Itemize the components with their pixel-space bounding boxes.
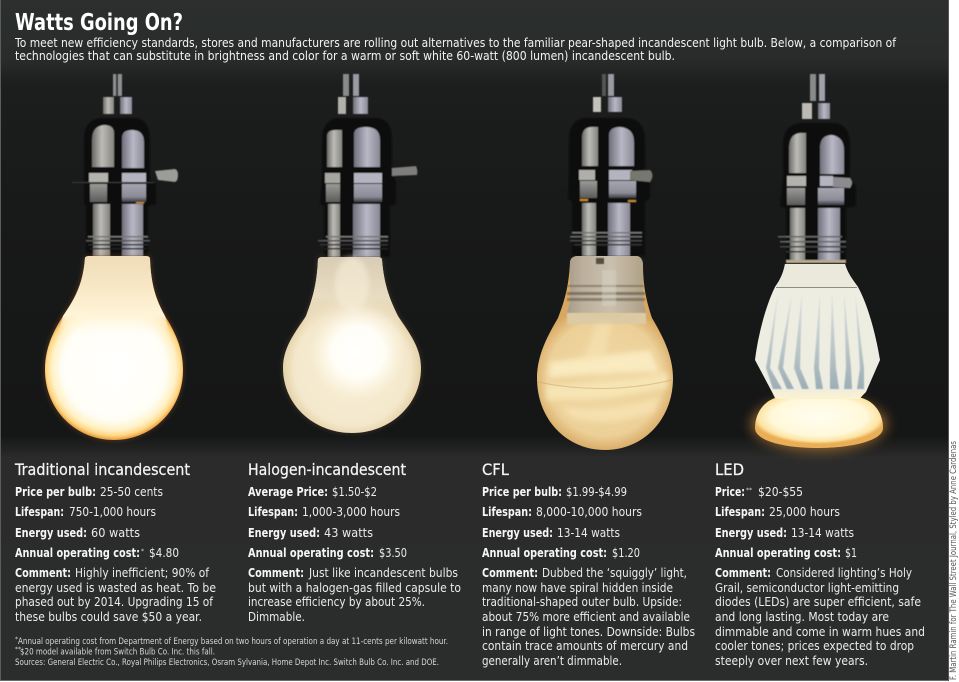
glass bulb: halogen [283,257,421,433]
comment: Comment: [15,566,71,580]
spec: energy: Energy used: [248,526,320,540]
spec: energy: Energy used: [15,526,87,540]
spec: price: Price per bulb: [15,485,96,499]
spec: price [715,485,803,499]
comment: Comment: [482,566,538,580]
comment: Comment: [715,566,771,580]
comment: energy used is wasted as heat. To be [15,581,216,595]
spec: energy: Energy used: [482,526,553,540]
photo: traditional incandescent bulb [45,74,183,440]
finned heat sink: LED [755,264,880,399]
spec: annual cost: $3.50 [379,546,407,560]
comment: increase efficiency by about 25%. [248,595,425,609]
comment: Just like incandescent bulbs [308,566,458,580]
footnotes and sources [15,636,448,668]
comment: traditional-shaped outer bulb. Upside: [482,595,682,609]
spec: energy [715,526,854,540]
comment: phased out by 2014. Upgrading 15 of [15,595,214,609]
spec: price: ** [746,487,752,494]
spec: lifespan: Lifespan: [715,505,765,519]
spec: annual cost: Annual operating cost: [248,546,374,560]
intro text: technologies that can substitute in brightness and color for a warm or soft white 60-watt (800 lumen) incandescent bulb. [15,49,675,64]
heading: Traditional incandescent [14,460,190,479]
spec: lifespan: 25,000 hours [769,505,840,519]
comment: contain trace amounts of mercury and [482,639,688,653]
comment: and long lasting. Most today are [715,610,889,624]
socket: CFL [568,74,652,256]
spec: annual cost: Annual operating cost: [15,546,140,560]
comment [15,566,216,624]
comment: in range of light tones. Downside: Bulbs [482,625,695,639]
lit diffuser dome: LED [751,397,887,451]
spec: annual cost: $4.80 [149,546,179,560]
spec: annual cost: $1.20 [612,546,640,560]
spec: price: Price per bulb: [482,485,562,499]
comment [248,566,461,624]
comment: Highly inefficient; 90% of [75,566,210,580]
comment [482,566,695,668]
spec: lifespan: 750-1,000 hours [69,505,156,519]
spec: lifespan [248,505,400,519]
glass bulb: traditional [45,256,183,440]
spec: annual cost: Annual operating cost: [482,546,607,560]
title: Watts Going On? [15,10,183,36]
photo credit: F. Martin Ramin for The Wall Street Journal, Styled by Anne Cardenas [949,441,959,680]
spec: lifespan: Lifespan: [15,505,64,519]
socket: traditional [72,74,178,256]
spec: lifespan [482,505,642,519]
heading: Halogen-incandescent [248,460,406,479]
comment: Dubbed the ‘squiggly’ light, [542,566,687,580]
photo: CFL bulb [537,74,673,450]
spec: annual cost: Annual operating cost: [715,546,841,560]
comment: steeply over next few years. [715,654,868,668]
footnotes and sources: * [15,636,18,643]
column: traditional incandescent [14,460,216,624]
footnotes and sources: Annual operating cost from Department of Energy based on two hours of operation a day at 11-cents per kilowatt hour. [18,637,448,647]
spec: energy: 60 watts [91,526,140,540]
spec: energy: Energy used: [715,526,787,540]
column: CFL [482,460,695,668]
spec: price: $1.99-$4.99 [566,485,627,499]
spec: lifespan: 1,000-3,000 hours [302,505,400,519]
spec: price: Average Price: [248,485,328,499]
glass bulb: CFL [537,256,673,450]
spec: lifespan: Lifespan: [482,505,532,519]
comment: but with a halogen-gas filled capsule to [248,581,461,595]
comment: Grail, semiconductor light-emitting [715,581,899,595]
footnotes and sources: $20 model available from Switch Bulb Co. Inc. this fall. [20,648,215,658]
comment: cooler tones; prices expected to drop [715,639,914,653]
comment: about 75% more efficient and available [482,610,690,624]
footnotes and sources: ** [15,646,21,653]
photo: halogen bulb [283,74,421,433]
spec: lifespan [715,505,840,519]
comment: Dimmable. [248,610,305,624]
spec: annual cost: * [141,548,144,555]
spec: price: $1.50-$2 [332,485,377,499]
footnotes and sources: Sources: General Electric Co., Royal Philips Electronics, Osram Sylvania, Home Depot Inc. Switch Bulb Co. Inc. and DOE. [15,658,439,668]
label print on neck: CFL [567,258,645,306]
spec: lifespan: Lifespan: [248,505,298,519]
spec: price [15,485,163,499]
spec: price: 25-50 cents [100,485,163,499]
socket: LED [778,74,856,263]
spec: energy: 13-14 watts [791,526,854,540]
spec: price: $20-$55 [758,485,803,499]
heading: CFL [482,460,509,479]
spec: energy: 43 watts [324,526,373,540]
spec: energy [482,526,620,540]
comment: many now have spiral hidden inside [482,581,673,595]
heading: LED [715,460,744,479]
spiral glow: CFL [546,324,668,422]
spec: energy: 13-14 watts [557,526,620,540]
spec: lifespan: 8,000-10,000 hours [536,505,642,519]
photo: LED bulb [751,74,887,451]
column: halogen-incandescent [248,460,461,624]
comment: these bulbs could save $50 a year. [15,610,202,624]
socket: halogen [318,74,417,257]
comment [715,566,925,668]
spec: price [482,485,627,499]
comment: diodes (LEDs) are super efficient, safe [715,595,921,609]
spec: lifespan [15,505,156,519]
comment: Considered lighting’s Holy [776,566,912,580]
spec: annual cost: $1 [845,546,857,560]
comment: generally aren’t dimmable. [482,654,622,668]
intro text [14,36,896,64]
column: LED [715,460,925,668]
comment: dimmable and come in warm hues and [715,625,925,639]
spec: price: Price: [715,485,745,499]
comment: Comment: [248,566,304,580]
